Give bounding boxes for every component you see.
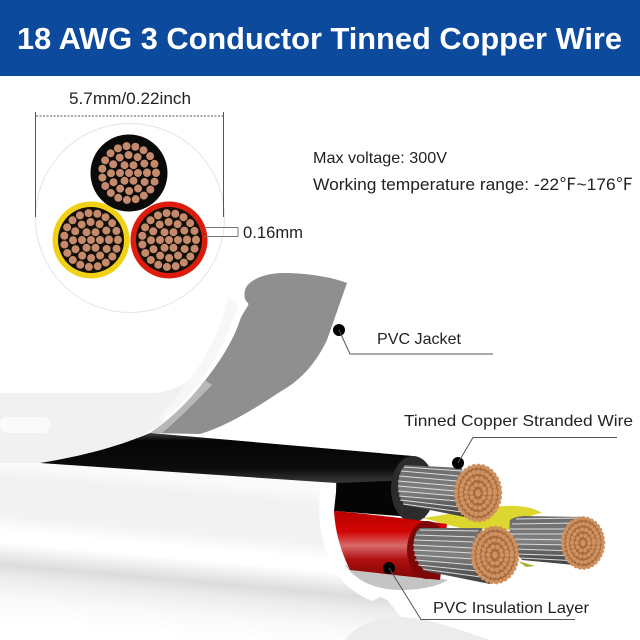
highlight on jacket [0, 417, 50, 433]
yellow conductor [52, 202, 130, 278]
black wire end [391, 456, 501, 522]
bottom reflection [345, 617, 490, 640]
red sheath [334, 511, 447, 580]
black copper face [455, 465, 501, 521]
cross-section diagram [36, 89, 303, 312]
title banner [0, 0, 640, 76]
black ring [391, 456, 435, 522]
background shadow band [0, 380, 190, 463]
jacket opening rim [319, 483, 395, 601]
callout: PVC insulation layer [383, 562, 590, 620]
inner cavity shadow [345, 565, 448, 590]
specifications text [313, 150, 633, 194]
flap lower shading [150, 380, 212, 433]
peeled jacket flap [150, 273, 347, 434]
callout: tinned copper stranded wire [404, 413, 633, 469]
callout: PVC jacket: PVC Jacket [377, 331, 462, 348]
outer jacket circle [36, 124, 224, 312]
working temperature: Working temperature range: -22℉~176℉ [313, 176, 633, 194]
black wire sheath [40, 433, 413, 512]
black conductor [90, 134, 168, 212]
strand thickness marker [204, 228, 238, 236]
black wire lower body [334, 480, 425, 518]
max voltage: Max voltage: 300V [313, 150, 447, 167]
dimension bracket [36, 112, 224, 217]
yellow wire [423, 506, 604, 569]
diameter label: 5.7mm/0.22inch [69, 89, 191, 108]
red ring [407, 521, 447, 579]
red wire strands [413, 528, 490, 584]
jacket body [0, 463, 420, 640]
red copper face [472, 527, 518, 583]
callout: tinned copper stranded wire: Tinned Copper Stranded Wire [404, 413, 633, 430]
yellow sheath [423, 506, 542, 530]
callout: PVC insulation layer: PVC Insulation Layer [433, 600, 590, 617]
callout: PVC jacket [333, 324, 493, 354]
yellow copper face [562, 517, 604, 569]
yellow wire strands [509, 516, 585, 566]
cable illustration [0, 273, 604, 640]
flap outer soft edge [155, 297, 238, 425]
title: 18 AWG 3 Conductor Tinned Copper Wire [17, 21, 622, 56]
red wire [334, 511, 518, 584]
yellow wire end [518, 561, 535, 567]
red conductor [130, 202, 208, 278]
strand thickness label: 0.16mm [243, 223, 303, 242]
black wire strands [398, 465, 470, 518]
